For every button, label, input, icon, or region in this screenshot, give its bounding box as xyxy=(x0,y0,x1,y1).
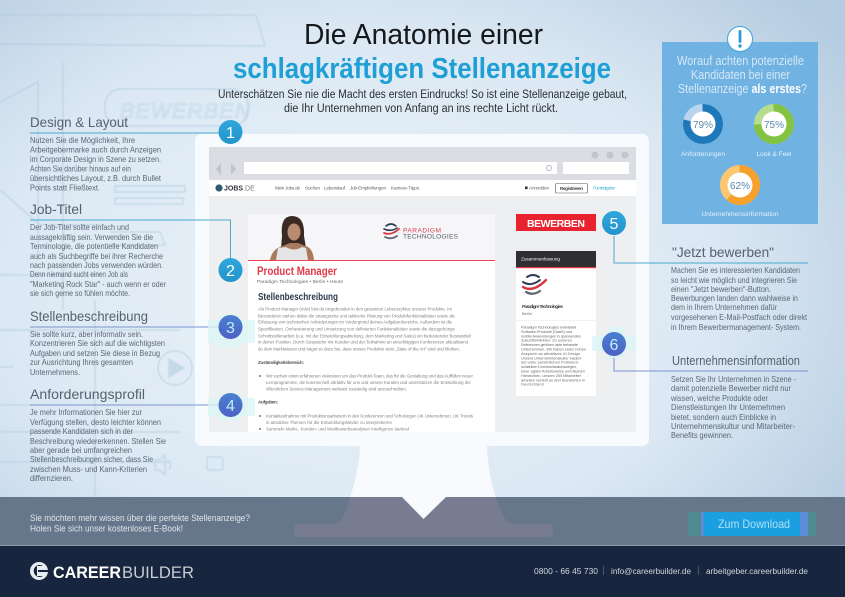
marker 1 xyxy=(218,120,242,144)
text block: Stellenbeschreibung: Konzentrieren Sie sich auf die wichtigsten xyxy=(30,339,165,348)
site navigation bar: Registrieren xyxy=(560,186,583,191)
summary sidebar: Hierarchien. Unsere 250 Mitarbeiter xyxy=(521,373,582,378)
callout 6 connector xyxy=(614,356,808,371)
site navigation bar: Für Arbeitgeber xyxy=(593,186,615,190)
address bar xyxy=(244,162,557,174)
text block: Unternehmensinformation xyxy=(670,353,800,440)
summary sidebar: arbeiten verteilt an drei Standorten in xyxy=(521,377,585,382)
summary sidebar: Zusammenfassung xyxy=(521,256,560,262)
text block: Design & Layout xyxy=(30,114,162,192)
text block: Jetzt bewerben: dem in Ihrem Unternehmen dafür xyxy=(671,303,777,312)
job ad body: Paradigm Technologies • Berlin • Heute xyxy=(257,279,343,284)
text block: Jetzt bewerben: "Jetzt bewerben" xyxy=(672,244,774,260)
text block: Job-Titel: Der Job-Titel sollte einfach und xyxy=(30,223,129,232)
download button xyxy=(688,512,816,536)
search box xyxy=(563,162,629,174)
text block: Anforderungsprofil: Beschreibung wiedererkennen. Stellen Sie xyxy=(30,437,166,446)
text block: Design & Layout: im Corporate Design in Szene zu setzen. xyxy=(30,155,161,164)
description paragraph xyxy=(258,306,471,352)
summary sidebar: Deutschland. xyxy=(521,382,545,387)
title: Die Anatomie einer xyxy=(304,19,543,51)
CareerBuilder logo: BUILDER xyxy=(122,564,194,582)
monitor notch xyxy=(402,497,446,519)
text block: Jetzt bewerben xyxy=(671,244,808,332)
text block: Stellenbeschreibung: Unternehmens. xyxy=(30,368,80,377)
text block: Unternehmensinformation: Benefits gewinnen. xyxy=(671,431,733,440)
text block: Design & Layout: Nutzen Sie die Möglichkeit, Ihre xyxy=(30,136,135,145)
marker 6 xyxy=(592,327,636,358)
text block: Stellenbeschreibung: zur Ausrichtung Ihres gesamten xyxy=(30,358,133,367)
apply button: BEWERBEN xyxy=(527,218,585,230)
marker 4 xyxy=(208,393,255,421)
responsibilities xyxy=(258,360,474,392)
panel: survey xyxy=(662,26,818,224)
section heading: Stellenbeschreibung xyxy=(258,292,338,303)
tasks: Kontaktaufnahme mit Produktionsarbeitern in den Konferenzen und Schulungen UK Unternehmen, UK Trends xyxy=(266,414,474,418)
summary sidebar: einer agilen Arbeitsweise und flachen xyxy=(521,368,585,374)
donut: Look & Feel 75% xyxy=(756,108,792,158)
summary sidebar: Berlin xyxy=(522,311,532,316)
job ad header xyxy=(248,214,495,261)
summary sidebar: Anspruch an attraktives UI-Design. xyxy=(521,351,581,356)
text block: Jetzt bewerben: Bewerbungen landen dann wahlweise in xyxy=(671,294,798,303)
site navigation bar: Karriere-Tipps xyxy=(391,186,420,190)
job ad body xyxy=(248,261,495,432)
CareerBuilder logo xyxy=(30,562,194,582)
subtitle: Unterschätzen Sie nie die Macht des ersten Eindrucks! So ist eine Stellenanzeige gebaut, xyxy=(218,87,627,101)
summary sidebar: Paradigm Technologies xyxy=(522,304,563,310)
description paragraph: in deiner Position. Durch Gespräche mit Kunden und der Teilnahme an einschlägigen Konferenzen aktualisierst xyxy=(258,340,469,344)
title xyxy=(233,19,611,85)
tasks: in attraktive Themen für die Entwicklungsländer zu interpretieren xyxy=(266,420,393,425)
monitor xyxy=(195,134,649,446)
text block: Jetzt bewerben: so leicht wie möglich und integrieren Sie xyxy=(671,276,797,285)
text block: Job-Titel: Job-Titel xyxy=(30,201,82,217)
woman photo xyxy=(270,216,314,260)
text block: Unternehmensinformation: Dienstleistungen Ihr Unternehmen xyxy=(671,403,785,412)
text block: Design & Layout: Arbeitgebermarke auch durch Anzeigen xyxy=(30,146,161,154)
text block: Unternehmensinformation: damit potenzielle Bewerber nicht nur xyxy=(671,384,791,393)
call-to-action text xyxy=(30,512,250,534)
footer xyxy=(0,546,845,597)
responsibilities: Wir suchen einen erfahrenen visionären um das Produkt-Team, das für die Gestaltung und das Auffüllen neuer xyxy=(266,374,474,378)
marker 1: 1 xyxy=(226,125,235,142)
donut: Unternehmensinformation 62% xyxy=(702,169,779,218)
summary sidebar: auf unter persönlichen Probleten, xyxy=(521,360,579,365)
text block: Anforderungsprofil: zwischen Muss- und Kann-Kriterien xyxy=(30,465,147,474)
text block: Design & Layout: übersichtliches Layout, z.B. durch Bullet xyxy=(30,174,162,183)
callout 4 connector xyxy=(30,404,218,406)
text block: Stellenbeschreibung: Aufgaben und setzen Sie diese in Bezug xyxy=(30,349,160,358)
text block: Anforderungsprofil xyxy=(30,386,166,483)
site navigation bar: Job-Empfehlungen xyxy=(350,186,386,190)
description paragraph: du dein Marktwissen und trägst so dazu bei, dass unsere Produkte stets „State of the Art" sind und bleiben. xyxy=(258,346,460,352)
background sketch of a job ad xyxy=(0,15,265,497)
tasks: Sammeln Markt-, Kunden- und Wettbewerbsanalysen Intelligence laufend xyxy=(266,426,410,432)
text block: Design & Layout: Design & Layout xyxy=(30,114,128,130)
reload icon xyxy=(546,165,552,171)
donut: Unternehmensinformation 62%: 62% xyxy=(730,181,750,192)
marker 2: 2 xyxy=(226,263,235,280)
site navigation bar: Anmelden xyxy=(529,186,549,190)
text block: Jetzt bewerben: vorgesehenen E-Mail-Postfach oder direkt xyxy=(671,313,808,322)
marker 3 xyxy=(208,315,255,348)
text block: Job-Titel: Terminologie, die potentielle Kandidaten xyxy=(30,242,158,251)
text block: Anforderungsprofil: aber gerade bei umfangreichen xyxy=(30,446,132,455)
tasks: Aufgaben: xyxy=(258,400,278,404)
callout 1 connector xyxy=(30,132,220,134)
Paradigm logo small xyxy=(523,275,546,294)
download button: Zum Download xyxy=(718,517,790,531)
text block: Job-Titel xyxy=(30,201,166,298)
responsibilities: öffentlichen Service-Management weltweit zuständig sind anzuschreiben. xyxy=(266,386,407,392)
donut: Look & Feel 75%: Look & Feel xyxy=(756,151,792,158)
tasks xyxy=(258,400,474,432)
background sketch of a job ad: BEWERBEN xyxy=(120,100,251,123)
site navigation bar: JOBS.DE xyxy=(224,186,255,192)
job ad header: PARADIGM xyxy=(403,228,441,234)
callout 5 connector xyxy=(614,236,808,263)
text block: Unternehmensinformation: wissen, welche Produkte oder xyxy=(670,394,768,403)
summary sidebar: Zukunftsmärkten. Zu unseren xyxy=(521,338,572,343)
text block: Anforderungsprofil: Je mehr Informationen Sie hier zur xyxy=(30,408,142,417)
browser window xyxy=(209,147,636,432)
text block: Anforderungsprofil: Anforderungsprofil xyxy=(30,386,145,402)
description paragraph: Erfassung von technischen Anforderungen im Vordergrund deines Aufgabenbereichs. Außerdem ist die xyxy=(258,320,453,324)
summary sidebar: Software-Produkte (SaaS) und xyxy=(521,329,572,334)
text block: Anforderungsprofil: passende Kandidaten sich in der xyxy=(30,427,133,436)
contact details xyxy=(534,566,808,576)
donut: Anforderungen 79% xyxy=(681,108,725,158)
icon: exclamation xyxy=(728,26,752,52)
text block: Unternehmensinformation: Unternehmensinformation xyxy=(672,353,800,368)
summary sidebar: Unsere Unternehmenskultur basiert xyxy=(521,355,582,360)
marker 6: 6 xyxy=(610,337,619,354)
panel question: Stellenanzeige als erstes? xyxy=(678,81,807,96)
job ad header: TECHNOLOGIES xyxy=(403,234,459,240)
text block: Anforderungsprofil: Stellenbeschreibungen sicher, dass Sie xyxy=(30,455,153,464)
donut: Look & Feel 75%: 75% xyxy=(764,120,784,131)
text block: Unternehmensinformation: Setzen Sie Ihr Unternehmen in Szene - xyxy=(671,375,796,384)
text block: Job-Titel: aussagekräftig sein. Verwenden Sie die xyxy=(30,233,153,242)
browser arrows xyxy=(216,163,236,175)
panel question: Worauf achten potenzielle xyxy=(677,53,804,68)
panel question xyxy=(677,53,807,96)
text block: Job-Titel: "Marketing Rock Star" - auch wenn er oder xyxy=(30,280,166,289)
CareerBuilder logo: CAREER xyxy=(53,564,121,582)
window dots xyxy=(592,152,628,158)
text block: Stellenbeschreibung: Stellenbeschreibung xyxy=(30,308,148,324)
text block: Design & Layout: Achten Sie darüber hinaus auf ein xyxy=(30,164,131,174)
text block: Design & Layout: Points statt Fließtext. xyxy=(30,184,100,192)
description paragraph: Schnittstellenarbeit (u.a. mit der Entwicklungsabteilung, dem Marketing und Sales) ein bedeutender Bestandteil xyxy=(258,334,471,338)
marker 3: 3 xyxy=(226,320,235,337)
responsibilities: Lernprogramme, die kommerziell attraktiv für uns und unsere Kunden und unterstützen die Entwicklung der xyxy=(266,380,472,385)
call-to-action band xyxy=(0,497,845,546)
text block: Unternehmensinformation: Unternehmenskultur und Mitarbeiter- xyxy=(671,422,795,431)
text block: Anforderungsprofil: differnzieren. xyxy=(30,474,73,483)
text block: Jetzt bewerben: einen "Jetzt bewerben"-Button. xyxy=(671,285,771,294)
title: schlagkräftigen Stellenanzeige xyxy=(233,53,611,85)
text block: Job-Titel: Denn niemand sucht einen Job als xyxy=(30,270,128,279)
text block: Anforderungsprofil: Verfügung stellen, desto leichter können xyxy=(30,418,161,427)
contact details: arbeitgeber.careerbuilder.de xyxy=(706,566,808,576)
text block: Stellenbeschreibung xyxy=(30,308,165,377)
site navigation bar: Mein Jobs.de xyxy=(275,186,300,190)
marker 5 xyxy=(602,211,626,235)
text block: Job-Titel: sie sich gerne so fühlen möchte. xyxy=(30,289,130,298)
subtitle xyxy=(218,87,627,115)
marker 5: 5 xyxy=(610,216,619,233)
description paragraph: Als Product Manager (m/w) bist du eingebunden in den gesamten Lebenszyklus unserer Produkte. Im xyxy=(258,306,452,312)
description paragraph: Besonderen stehen dabei die strategische und taktische Planung von Produktfunktionalitäten sowie die xyxy=(258,314,456,318)
donut: Anforderungen 79%: Anforderungen xyxy=(681,151,725,158)
text block: Jetzt bewerben: Machen Sie es interessierten Kandidaten xyxy=(671,266,800,275)
contact details: info@careerbuilder.de xyxy=(611,566,691,576)
summary sidebar: schlanken Kommunikationswegen, xyxy=(521,364,577,369)
job title: Product Manager xyxy=(257,266,337,278)
text block: Job-Titel: auch als Suchbegriffe bei ihrer Recherche xyxy=(30,252,163,261)
text block: Job-Titel: nach passenden Jobs verwenden würden. xyxy=(30,261,163,270)
marker 2 xyxy=(218,258,242,282)
summary sidebar xyxy=(516,251,596,396)
description paragraph: Spezifikation, Orchestrierung und Umsetzung von definierten Funktionalitäten sowie die dazugehörige xyxy=(258,326,456,332)
call-to-action text: Sie möchten mehr wissen über die perfekte Stellenanzeige? xyxy=(30,512,250,523)
apply button xyxy=(516,214,596,231)
site navigation bar: Suchen xyxy=(305,186,320,190)
Paradigm logo xyxy=(384,224,399,238)
responsibilities: Zuständigkeitsbereich: xyxy=(258,360,304,365)
summary sidebar: Referenzen gehören viele bekannte xyxy=(521,342,578,347)
marker 4: 4 xyxy=(226,398,235,415)
monitor stand xyxy=(294,446,553,537)
stand seen through band xyxy=(294,497,553,537)
site navigation bar xyxy=(209,180,636,196)
text block: Jetzt bewerben: in Ihrem Bewerbermanagement- System. xyxy=(671,323,801,332)
callout 3 connector xyxy=(30,326,218,328)
panel question: Kandidaten bei einer xyxy=(691,67,791,82)
donut: Unternehmensinformation 62%: Unternehmensinformation xyxy=(702,211,779,218)
text block: Unternehmensinformation: bietet, sondern auch Einblicke in xyxy=(671,413,776,422)
callout 2 connector xyxy=(30,220,230,258)
subtitle: die Ihr Unternehmen von Anfang an ins rechte Licht rückt. xyxy=(284,101,558,115)
donut: Anforderungen 79%: 79% xyxy=(693,120,713,131)
text block: Stellenbeschreibung: Sie sollte kurz, aber informativ sein. xyxy=(30,330,143,339)
contact details: 0800 - 66 45 730 xyxy=(534,566,598,576)
summary sidebar: Unternehmen. Wir haben einen hohen xyxy=(521,346,586,352)
site navigation bar: Lebenslauf xyxy=(324,186,346,190)
summary sidebar: mobile Anwendungen in spannenden xyxy=(521,333,581,338)
call-to-action text: Holen Sie sich unser kostenloses E-Book! xyxy=(30,522,183,534)
summary sidebar: Paradigm Technologies entwickelt xyxy=(521,324,577,330)
